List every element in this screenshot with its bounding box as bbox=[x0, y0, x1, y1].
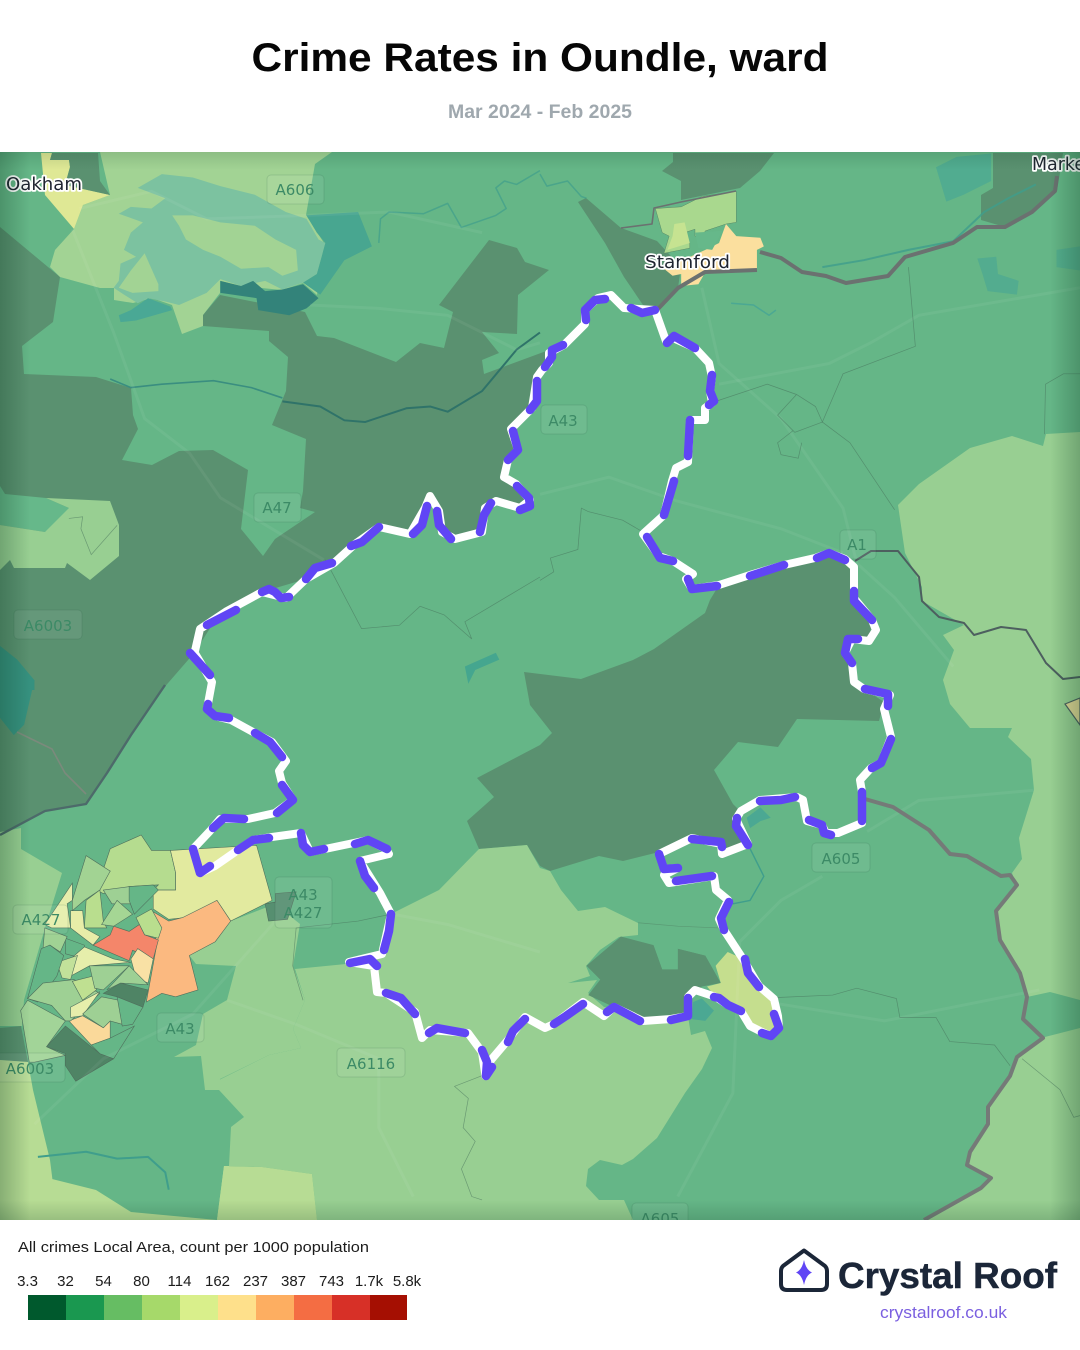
legend scale labels bbox=[17, 1273, 422, 1290]
road label: A6003 north bbox=[14, 610, 82, 639]
road label: A605 east: A605 bbox=[822, 850, 860, 868]
road label: A427 bbox=[13, 905, 68, 934]
road label: A47 bbox=[254, 493, 301, 522]
legend scale labels: 32 bbox=[57, 1273, 74, 1290]
legend scale labels: 3.3 bbox=[17, 1273, 38, 1290]
road label: A606 bbox=[267, 175, 324, 204]
road labels bbox=[0, 175, 876, 1232]
south-west light areas bbox=[0, 828, 317, 1220]
county border lines bbox=[0, 176, 1080, 1220]
logo: Crystal Roof bbox=[781, 1250, 1058, 1322]
subtitle: date range: Mar 2024 - Feb 2025 bbox=[448, 102, 632, 123]
road label: A43 / A427: A427 bbox=[284, 904, 322, 922]
road label: A43 south bbox=[157, 1013, 204, 1042]
Rutland area bbox=[50, 152, 372, 334]
icon: house with star bbox=[781, 1250, 827, 1290]
road label: A605 south: A605 bbox=[641, 1210, 679, 1228]
Oakham wards bbox=[41, 153, 110, 229]
place name: Oakham: Oakham bbox=[6, 174, 82, 195]
south-east dark and yellow wards bbox=[586, 923, 779, 1036]
central dark region bbox=[467, 553, 884, 871]
road label: A6003 north: A6003 bbox=[24, 617, 72, 635]
thin administrative boundaries bbox=[69, 267, 1080, 1200]
map base: mid green bbox=[0, 152, 1080, 1220]
ward outline: white underlay bbox=[193, 295, 891, 1076]
legend scale labels: 5.8k bbox=[393, 1273, 422, 1290]
legend bbox=[17, 1239, 422, 1320]
road label: A43 / A427 bbox=[275, 877, 332, 928]
legend scale labels: 387 bbox=[281, 1273, 306, 1290]
ward outline: purple dashes bbox=[190, 299, 891, 1076]
road label: A1 bbox=[840, 530, 876, 559]
legend scale labels: 237 bbox=[243, 1273, 268, 1290]
rivers and water bodies bbox=[0, 153, 1080, 1190]
legend scale labels: 80 bbox=[133, 1273, 150, 1290]
road label: A1: A1 bbox=[847, 536, 867, 554]
road label: A605 east bbox=[812, 843, 870, 872]
legend scale labels: 743 bbox=[319, 1273, 344, 1290]
faint roads bbox=[34, 191, 1080, 1197]
ward boundary: Oundle dashed outline bbox=[190, 295, 891, 1076]
place name: Stamford: Stamford bbox=[645, 252, 730, 273]
road label: A6116 bbox=[337, 1048, 405, 1077]
large dark region: north-west bbox=[0, 227, 549, 835]
road label: A427: A427 bbox=[22, 911, 60, 929]
legend scale labels: 162 bbox=[205, 1273, 230, 1290]
choropleth map bbox=[0, 152, 1080, 1232]
road label: A43 north: A43 bbox=[548, 412, 578, 430]
Stamford dark wards bbox=[578, 153, 1063, 310]
website: crystalroof.co.uk bbox=[880, 1304, 1008, 1322]
road label: A43 / A427: A43 bbox=[288, 886, 318, 904]
map edge vignette bbox=[0, 152, 1080, 1220]
road label: A6003 south bbox=[0, 1053, 65, 1082]
east light area bbox=[898, 432, 1080, 1220]
road label: A606: A606 bbox=[276, 181, 314, 199]
legend scale labels: 114 bbox=[168, 1273, 191, 1290]
legend colour ramp bbox=[28, 1295, 407, 1320]
road label: A6116: A6116 bbox=[347, 1055, 395, 1073]
Northampton-side town wards bbox=[21, 835, 296, 1081]
west light areas bbox=[0, 486, 119, 580]
road label: A43 north bbox=[541, 405, 587, 434]
Stamford town wards bbox=[655, 191, 764, 286]
south light area bbox=[174, 845, 712, 1220]
road label: A47: A47 bbox=[262, 499, 292, 517]
road label: A43 south: A43 bbox=[165, 1020, 195, 1038]
road label: A6003 south: A6003 bbox=[6, 1060, 54, 1078]
road label: A605 south bbox=[632, 1202, 688, 1220]
legend scale labels: 1.7k bbox=[355, 1273, 384, 1290]
title: Crime Rates in Oundle, ward bbox=[252, 36, 828, 80]
wordmark: Crystal Roof bbox=[838, 1255, 1058, 1296]
legend title: All crimes Local Area, count per 1000 population bbox=[18, 1239, 369, 1256]
legend scale labels: 54 bbox=[95, 1273, 112, 1290]
